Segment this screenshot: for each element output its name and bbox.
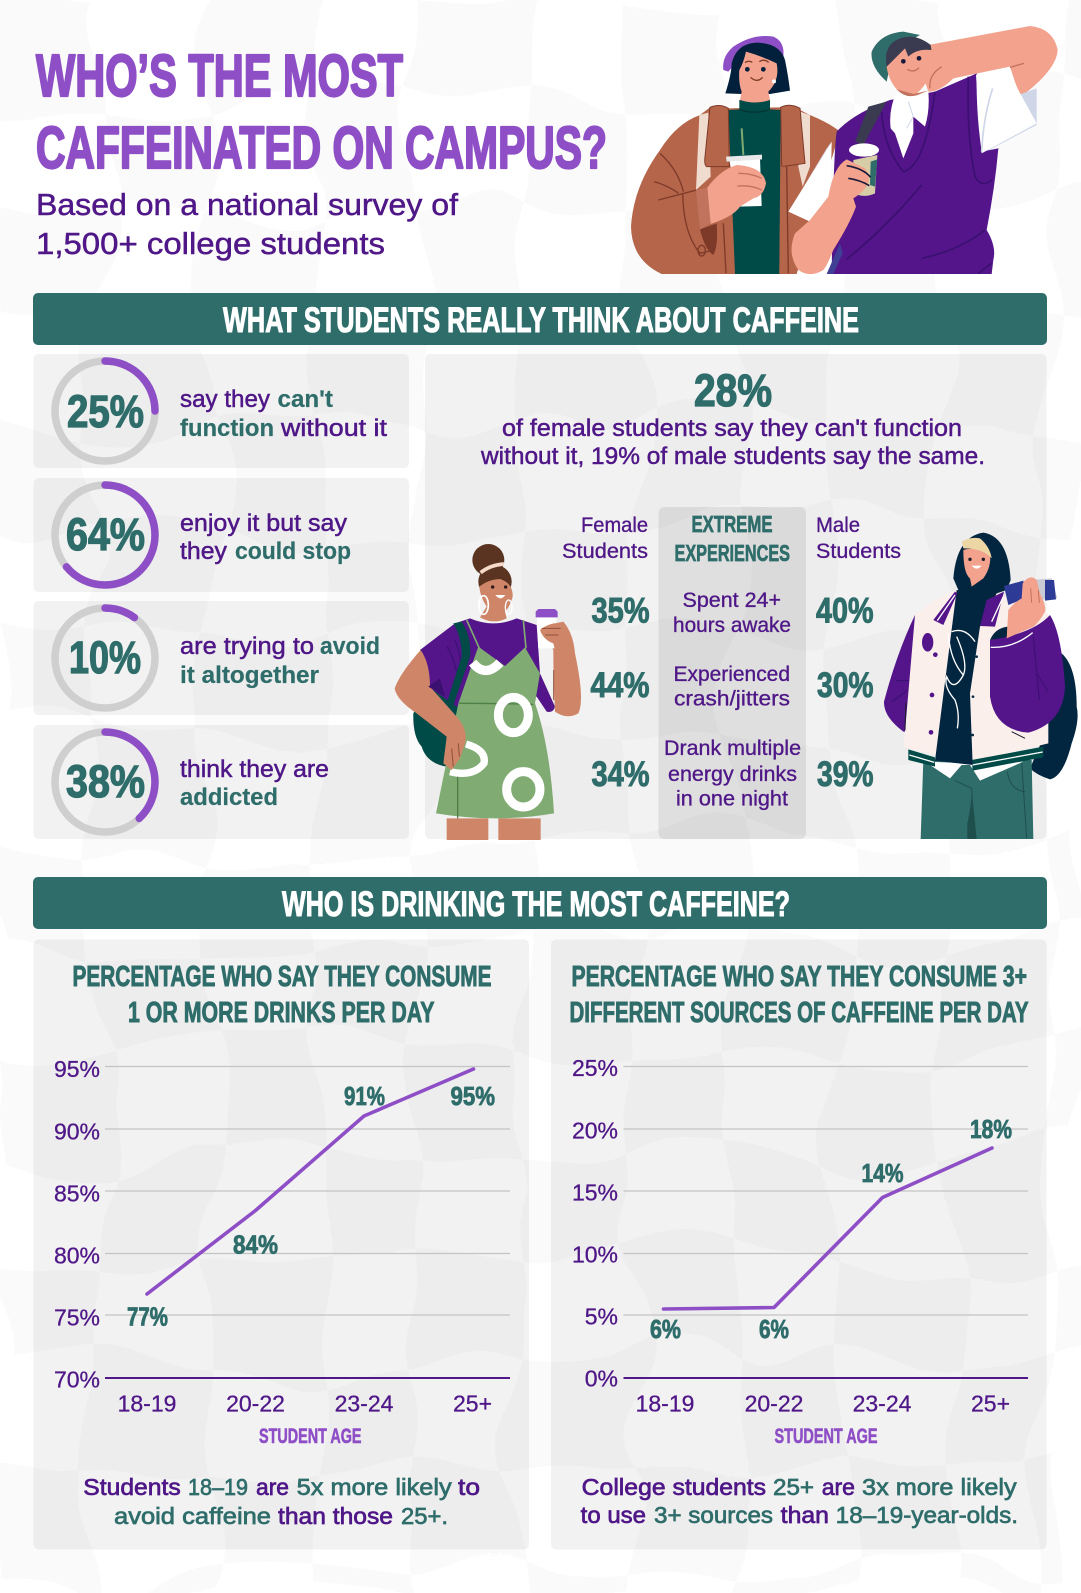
donut: 64%: 64% (66, 509, 145, 560)
chart title: PERCENTAGE WHO SAY THEY CONSUME (72, 961, 491, 993)
callout: 5x more likely: avoid caffeine (114, 1503, 271, 1529)
column: extreme experiences: Experienced (674, 662, 790, 686)
column: extreme experiences: hours awake (673, 613, 791, 637)
line chart: caffeine sources by age: 25+ (971, 1390, 1010, 1416)
column: extreme experiences: crash/jitters (674, 686, 790, 710)
donut: 25%: 25% (67, 386, 144, 437)
callout: 3x more likely: to use (581, 1502, 646, 1528)
line chart: drinks per day by age: 80% (54, 1242, 100, 1268)
line chart: drinks per day by age (54, 1056, 510, 1448)
illustration: female student with coffee (395, 544, 581, 840)
panel: 64% could stop (34, 478, 409, 592)
text: say they can't function without it: say they (180, 386, 270, 413)
section header: who is drinking the most caffeine: WHO IS DRINKING THE MOST CAFFEINE? (282, 884, 790, 924)
text: say they can't function without it (180, 386, 387, 442)
text: say they can't function without it: without it (280, 415, 387, 442)
column: male students: 30% (817, 665, 874, 705)
illustration: male student with energy drink (884, 533, 1078, 839)
text: say they can't function without it: function (180, 415, 274, 442)
column: extreme experiences: EXTREME (692, 511, 772, 537)
text: enjoy it but say they could stop (180, 510, 351, 565)
column: male students: 39% (817, 754, 874, 794)
subtitle: 1,500+ college students (36, 226, 385, 261)
text: say they can't function without it: can't (278, 386, 333, 413)
callout: 3x more likely: College students (582, 1474, 766, 1500)
section header: who is drinking the most caffeine (33, 877, 1047, 929)
text: are trying to avoid it altogether (180, 633, 380, 689)
line chart: drinks per day by age: 85% (54, 1180, 100, 1206)
section header: what students really think (33, 293, 1047, 345)
title: WHO’S THE MOST (36, 43, 403, 109)
donut: 64% (55, 485, 155, 585)
line chart: drinks per day by age: 95% (450, 1083, 495, 1111)
column: male students (816, 513, 901, 794)
panel: 3+ sources per day (551, 940, 1046, 1550)
line chart: drinks per day by age: 91% (344, 1083, 385, 1111)
callout: 3x more likely: than (781, 1502, 829, 1528)
donut: 25% (55, 361, 155, 461)
callout: 5x more likely: 25+. (401, 1503, 448, 1529)
column: female students (562, 513, 650, 794)
text: are trying to avoid it altogether: avoid (320, 633, 380, 660)
callout: 5x more likely: 18–19 (188, 1474, 248, 1500)
text: think they are addicted: think they are (180, 756, 329, 783)
column: extreme experiences: Drank multiple (664, 736, 801, 760)
callout: 5x more likely: than those (278, 1503, 393, 1529)
column: female students: 44% (590, 665, 650, 705)
callout: 3x more likely (581, 1474, 1018, 1528)
donut: 38%: 38% (66, 756, 145, 807)
line chart: drinks per day by age: 18-19 (118, 1390, 176, 1416)
callout: 3x more likely: 3+ sources (654, 1502, 773, 1528)
line chart: drinks per day by age: 25+ (453, 1390, 492, 1416)
donut: 10%: 10% (69, 632, 141, 683)
callout: 5x more likely (83, 1474, 480, 1529)
line chart: caffeine sources by age: STUDENT AGE (774, 1425, 878, 1448)
line chart: drinks per day by age: 20-22 (226, 1390, 285, 1416)
donut: 10% (55, 608, 155, 708)
text: enjoy it but say they could stop: could stop (235, 538, 351, 565)
callout: 5x more likely: to (458, 1474, 480, 1500)
line chart: caffeine sources by age: 6% (650, 1316, 681, 1344)
text: are trying to avoid it altogether: are trying to (180, 633, 314, 660)
line chart: drinks per day by age: 90% (54, 1118, 100, 1144)
callout: 3x more likely: are (822, 1474, 855, 1500)
line chart: caffeine sources by age (572, 1055, 1028, 1448)
column: female students: Students (562, 539, 648, 563)
callout: 3x more likely: 3x more likely (862, 1474, 1017, 1500)
line chart: drinks per day by age: 84% (233, 1232, 278, 1260)
line chart: drinks per day by age: 77% (127, 1304, 168, 1332)
text: enjoy it but say they could stop: they (180, 538, 227, 565)
line chart: drinks per day by age: 75% (54, 1304, 100, 1330)
line chart: drinks per day by age: 23-24 (335, 1390, 394, 1416)
column: extreme experiences: in one night (676, 786, 788, 810)
column: extreme experiences: Spent 24+ (682, 588, 781, 612)
title (36, 43, 607, 181)
callout: 5x more likely: are (256, 1474, 289, 1500)
line chart: caffeine sources by age: 18% (970, 1116, 1012, 1144)
line chart: caffeine sources by age: 10% (572, 1242, 618, 1268)
text: think they are addicted: addicted (180, 784, 278, 811)
callout: 3x more likely: 18–19-year-olds. (836, 1502, 1018, 1528)
panel: 10% trying to avoid (34, 601, 409, 715)
column: male students: Students (816, 539, 901, 563)
column: extreme experiences: energy drinks (668, 762, 797, 786)
text: female versus male statement: of female students say they can't function (502, 415, 962, 442)
column: female students: Female (581, 513, 648, 537)
line chart: drinks per day by age: STUDENT AGE (259, 1425, 362, 1448)
chart title (72, 961, 491, 1029)
line chart: caffeine sources by age: 5% (585, 1304, 618, 1330)
line chart: drinks per day by age: 70% (54, 1366, 100, 1392)
panel: 1 or more drinks per day (34, 940, 529, 1550)
column: extreme experiences: EXPERIENCES (674, 540, 790, 566)
column: female students: 35% (592, 590, 650, 630)
text: female versus male statement: without it, 19% of male students say the same. (480, 443, 985, 470)
text: female versus male statement (480, 415, 985, 470)
chart title (570, 961, 1028, 1029)
line chart: caffeine sources by age: 25% (572, 1055, 618, 1081)
illustration: two students holding coffee cups (631, 26, 1058, 274)
line chart: caffeine sources by age: 18-19 (636, 1390, 694, 1416)
callout: 5x more likely: 5x more likely (297, 1474, 452, 1500)
donut: 38% (55, 732, 155, 832)
line chart: caffeine sources by age: 20-22 (745, 1390, 803, 1416)
panel: 25% can't function (34, 354, 409, 468)
line chart: caffeine sources by age: 20% (572, 1118, 618, 1144)
text: are trying to avoid it altogether: it altogether (180, 662, 319, 689)
panel: gender comparison (395, 354, 1078, 840)
line chart: caffeine sources by age: 6% (759, 1316, 789, 1344)
chart title: 1 OR MORE DRINKS PER DAY (128, 997, 434, 1029)
line chart: caffeine sources by age: 0% (585, 1366, 618, 1392)
text: think they are addicted (180, 756, 329, 811)
column: female students: 34% (592, 754, 650, 794)
title: CAFFEINATED ON CAMPUS? (36, 115, 607, 181)
line chart: caffeine sources by age: 15% (572, 1180, 618, 1206)
line chart: drinks per day by age: 95% (54, 1056, 100, 1082)
subtitle (36, 187, 458, 261)
line chart: caffeine sources by age: 23-24 (853, 1390, 912, 1416)
text: enjoy it but say they could stop: enjoy it but say (180, 510, 347, 537)
callout: 3x more likely: 25+ (773, 1474, 814, 1500)
stat: 28%: 28% (694, 365, 772, 416)
subtitle: Based on a national survey of (36, 187, 458, 222)
column: extreme experiences (658, 507, 806, 839)
column: male students: Male (816, 513, 860, 537)
column: male students: 40% (816, 590, 874, 630)
callout: 5x more likely: Students (83, 1474, 181, 1500)
line chart: caffeine sources by age: 14% (862, 1160, 904, 1188)
panel: 38% addicted (34, 725, 409, 839)
